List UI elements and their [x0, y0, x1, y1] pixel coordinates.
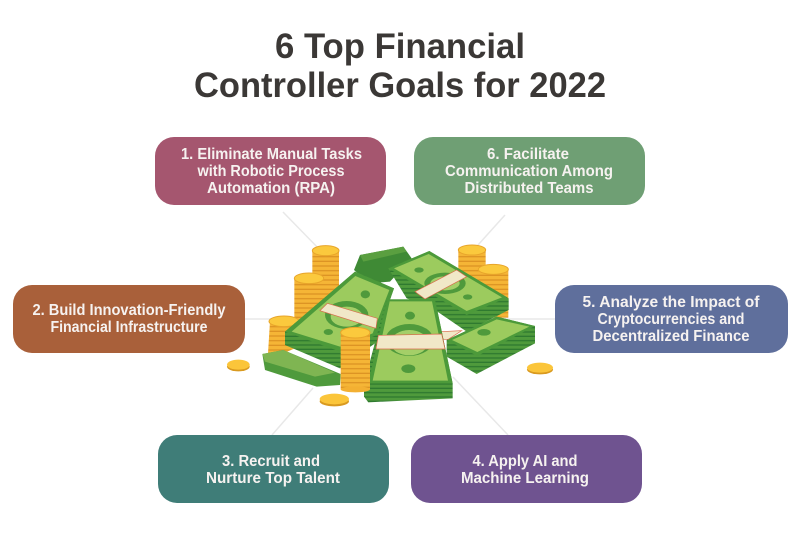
panel: goal 3 [158, 435, 389, 503]
loose coins [227, 360, 553, 406]
bundle left [285, 272, 394, 368]
panel: goal 5: Cryptocurrencies and [598, 311, 744, 328]
panel: goal 5 [555, 285, 788, 353]
panel: goal 6: Communication Among [445, 163, 613, 180]
panel: goal 1 [155, 137, 386, 205]
panel: goal 1: Automation (RPA) [207, 180, 335, 197]
bundle front centre [364, 299, 453, 402]
panel: goal 6: Distributed Teams [464, 180, 594, 197]
title [194, 27, 606, 105]
panel: goal 1: 1. Eliminate Manual Tasks [181, 146, 362, 163]
panel: goal 3: 3. Recruit and [222, 453, 320, 470]
bundle back left [354, 247, 412, 283]
panel: goal 2 [13, 285, 245, 353]
bundle front left [262, 350, 341, 387]
title: Controller Goals for 2022 [194, 66, 606, 105]
panel: goal 6 [414, 137, 645, 205]
panel: goal 5: 5. Analyze the Impact of [582, 294, 760, 311]
panel: goal 2: Financial Infrastructure [50, 319, 208, 336]
bundle back right [388, 251, 509, 332]
panel: goal 5: Decentralized Finance [592, 328, 750, 345]
panel: goal 4: 4. Apply AI and [472, 453, 578, 470]
coin stacks behind [268, 245, 508, 353]
panel: goal 1: with Robotic Process [197, 163, 344, 180]
panel: goal 3: Nurture Top Talent [206, 470, 340, 487]
icon: pile of money and coins [227, 245, 553, 406]
panel: goal 6: 6. Facilitate [487, 146, 569, 163]
panel: goal 4 [411, 435, 642, 503]
coin stack front [341, 327, 370, 392]
panel: goal 2: 2. Build Innovation-Friendly [32, 302, 226, 319]
panel: goal 4: Machine Learning [461, 470, 589, 487]
bundle right [440, 317, 535, 374]
title: 6 Top Financial [275, 27, 525, 66]
